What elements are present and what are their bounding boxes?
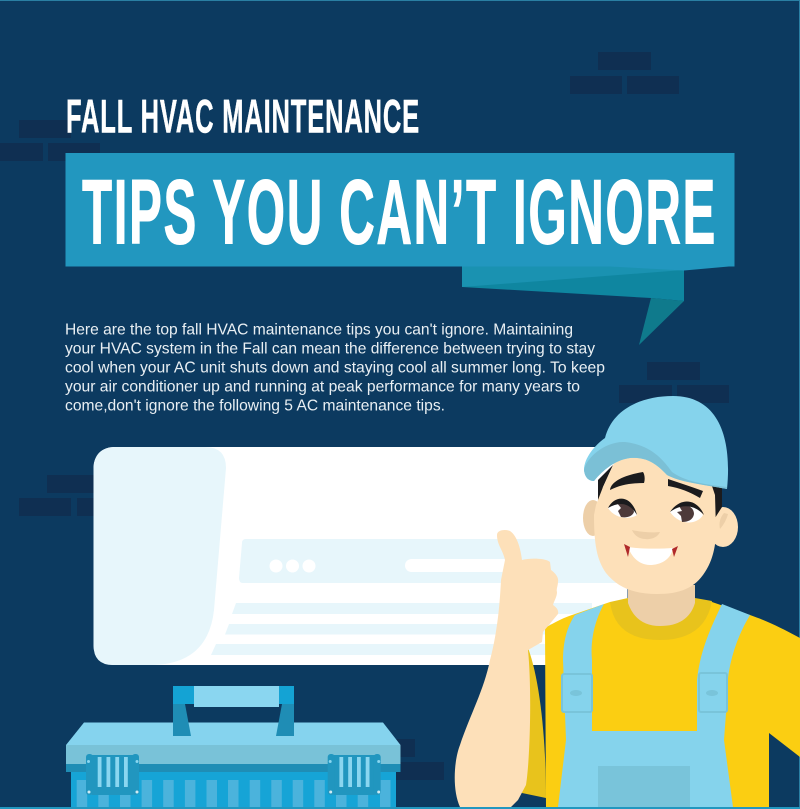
hair sideburns xyxy=(598,465,722,518)
left eye xyxy=(608,499,637,518)
overalls xyxy=(558,604,750,807)
cap xyxy=(584,396,728,489)
intro paragraph: your air conditioner up and running at peak performance for many years to xyxy=(65,378,580,396)
technician character xyxy=(455,396,800,807)
intro paragraph: your HVAC system in the Fall can mean the difference between trying to stay xyxy=(65,340,595,358)
nose xyxy=(632,530,660,539)
bottom edge line xyxy=(0,807,800,809)
intro paragraph: come,don't ignore the following 5 AC maintenance tips. xyxy=(65,398,445,414)
face xyxy=(594,450,716,594)
toolbox xyxy=(66,686,400,807)
ears xyxy=(583,500,738,547)
heading: fall hvac maintenance: FALL HVAC MAINTENANCE xyxy=(66,90,420,143)
smile xyxy=(624,544,678,565)
arm with thumbs-up hand xyxy=(455,530,558,807)
air conditioner unit xyxy=(94,447,628,665)
toolbox lid xyxy=(66,722,400,772)
toolbox body xyxy=(71,772,396,807)
toolbox latch left xyxy=(86,754,139,795)
intro paragraph: Here are the top fall HVAC maintenance tips you can't ignore. Maintaining xyxy=(65,322,573,338)
toolbox latch right xyxy=(328,754,381,795)
banner ribbon with tail xyxy=(66,153,734,345)
collar xyxy=(610,598,712,640)
intro paragraph: cool when your AC unit shuts down and staying cool all summer long. To keep xyxy=(65,360,605,376)
neck xyxy=(628,585,695,626)
shirt xyxy=(522,602,800,807)
intro paragraph xyxy=(65,322,605,414)
eyebrows xyxy=(610,472,703,498)
right eye xyxy=(670,501,704,523)
toolbox handle xyxy=(173,686,294,736)
